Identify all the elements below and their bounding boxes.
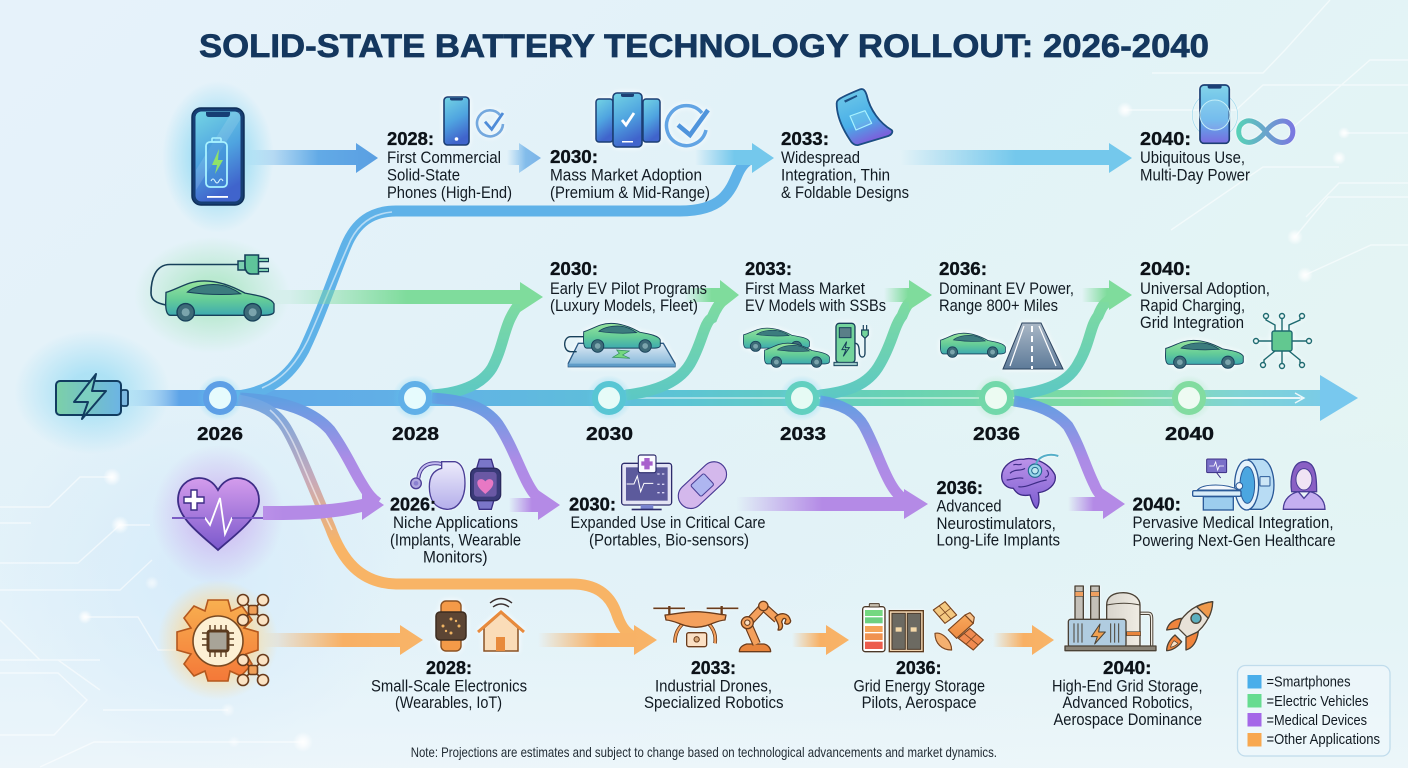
text: smartphones 2033: & Foldable Designs bbox=[781, 183, 909, 202]
text: smartphones 2033: 2033: bbox=[781, 129, 829, 149]
text: EV 2033: First Mass Market bbox=[745, 279, 865, 298]
timeline node 2033 bbox=[779, 375, 825, 421]
text: other 2028 bbox=[371, 658, 527, 712]
text: EV 2040 bbox=[1140, 259, 1270, 332]
text: EV 2030: (Luxury Models, Fleet) bbox=[550, 296, 698, 315]
row arrows: electric vehicles bbox=[271, 280, 1132, 312]
icon: industrial drone and robot arm bbox=[653, 601, 791, 652]
text: other 2033: Industrial Drones, bbox=[655, 677, 772, 696]
branch: EV from 2033 bbox=[820, 297, 918, 395]
text: medical 2040 bbox=[1132, 495, 1336, 550]
text: smartphones 2040 bbox=[1140, 129, 1250, 185]
title: SOLID-STATE BATTERY TECHNOLOGY ROLLOUT: 2026-2040 bbox=[199, 28, 1209, 64]
text: EV 2036 bbox=[939, 259, 1074, 315]
text: medical 2036: Long-Life Implants bbox=[936, 531, 1060, 550]
text: medical 2030: (Portables, Bio-sensors) bbox=[589, 531, 749, 550]
icon: phone and check 2028 bbox=[444, 97, 503, 145]
timeline node 2028 bbox=[392, 375, 438, 421]
timeline node 2040 bbox=[1166, 375, 1212, 421]
timeline year labels: 2030 bbox=[586, 424, 633, 444]
text: other 2033: Specialized Robotics bbox=[644, 693, 784, 712]
text: EV 2040: 2040: bbox=[1140, 259, 1191, 279]
text: EV 2030 bbox=[550, 259, 707, 315]
timeline node 2036 bbox=[973, 375, 1019, 421]
branch: medical from 2028 bbox=[432, 398, 544, 503]
text: EV 2033: EV Models with SSBs bbox=[745, 296, 886, 315]
text: EV 2036: 2036: bbox=[939, 259, 987, 279]
branch: other applications bbox=[238, 400, 634, 637]
text: EV 2030: Early EV Pilot Programs bbox=[550, 279, 707, 298]
text: EV 2040: Rapid Charging, bbox=[1140, 296, 1245, 315]
icon: battery start bbox=[14, 330, 170, 454]
text: smartphones 2033: Widespread bbox=[781, 148, 860, 167]
branch: EV from 2028 bbox=[432, 297, 530, 395]
icon: car and road bbox=[940, 323, 1063, 369]
text: smartphones 2030: (Premium & Mid-Range) bbox=[550, 183, 710, 202]
text: other 2028: Small-Scale Electronics bbox=[371, 677, 527, 696]
timeline year labels: 2026 bbox=[197, 424, 243, 444]
icon: orange smartwatch and smart home bbox=[436, 598, 524, 651]
icon: MRI scanner and clinician bbox=[1193, 459, 1325, 510]
text: smartphones 2030 bbox=[550, 147, 710, 202]
text: medical 2030 bbox=[569, 495, 766, 550]
text: smartphones 2028: Phones (High-End) bbox=[387, 183, 512, 202]
text: EV 2040: Grid Integration bbox=[1140, 313, 1244, 332]
row arrows: medical bbox=[263, 489, 1125, 520]
text: other 2036: Grid Energy Storage bbox=[854, 677, 985, 696]
icon: electric vehicle category bbox=[134, 237, 290, 353]
text: other 2036 bbox=[854, 658, 985, 712]
text: smartphones 2033: Integration, Thin bbox=[781, 166, 890, 185]
text: other 2033 bbox=[644, 658, 784, 712]
branch: medical from 2026 bbox=[240, 398, 378, 503]
text: smartphones 2028 bbox=[387, 129, 512, 202]
timeline year labels: 2040 bbox=[1165, 424, 1214, 444]
text: other 2040: High-End Grid Storage, bbox=[1052, 677, 1202, 696]
text: medical 2026 bbox=[390, 495, 521, 567]
branch: medical from 2036 bbox=[1014, 401, 1112, 503]
icon: cars and charger bbox=[743, 323, 868, 367]
text: EV 2036: Dominant EV Power, bbox=[939, 279, 1074, 298]
legend: =Other Applications bbox=[1266, 731, 1380, 748]
timeline year labels: 2033 bbox=[780, 424, 826, 444]
text: other 2040 bbox=[1052, 658, 1202, 729]
text: medical 2036: 2036: bbox=[936, 478, 983, 498]
icon: foldable phone 2033 bbox=[837, 89, 892, 145]
text: EV 2040: Universal Adoption, bbox=[1140, 279, 1270, 298]
timeline year labels: 2036 bbox=[973, 424, 1020, 444]
legend: =Medical Devices bbox=[1266, 712, 1367, 729]
icon: car on charging pad bbox=[565, 323, 675, 367]
text: other 2040: Advanced Robotics, bbox=[1062, 693, 1193, 712]
branch: EV from 2030 bbox=[626, 297, 726, 395]
icon: car and chip network bbox=[1165, 314, 1312, 368]
icon: smartphone category bbox=[162, 81, 274, 233]
text: other 2040: 2040: bbox=[1103, 658, 1152, 678]
text: other 2036: Pilots, Aerospace bbox=[862, 693, 977, 712]
timeline node 2026 bbox=[197, 375, 243, 421]
text: other 2028: (Wearables, IoT) bbox=[395, 693, 502, 712]
text: smartphones 2040: Multi-Day Power bbox=[1140, 166, 1250, 185]
text: smartphones 2028: 2028: bbox=[387, 129, 434, 149]
icon: phones and check 2030 bbox=[596, 93, 708, 147]
main timeline arrow bbox=[130, 375, 1358, 421]
icon: other applications category bbox=[158, 580, 278, 700]
legend: =Electric Vehicles bbox=[1266, 693, 1368, 710]
row arrows: other applications bbox=[263, 625, 1054, 655]
text: smartphones 2030: 2030: bbox=[550, 147, 598, 167]
branch: EV from 2036 bbox=[1014, 297, 1116, 395]
text: medical 2026: (Implants, Wearable bbox=[390, 531, 521, 550]
icon: battery bank and satellite bbox=[863, 602, 983, 652]
row arrows: smartphones bbox=[246, 143, 1132, 173]
text: medical 2026: Monitors) bbox=[423, 548, 488, 567]
text: medical 2030: Expanded Use in Critical Care bbox=[570, 513, 766, 532]
text: medical 2026: 2026: bbox=[390, 495, 436, 515]
text: medical 2040: 2040: bbox=[1132, 495, 1181, 515]
timeline year labels: 2028 bbox=[392, 424, 439, 444]
text: other 2040: Aerospace Dominance bbox=[1054, 710, 1202, 729]
text: medical 2036 bbox=[936, 478, 1060, 550]
icon: pacemaker and smartwatch bbox=[411, 459, 501, 509]
branch: smartphones bbox=[237, 158, 752, 396]
text: medical 2040: Powering Next-Gen Healthcare bbox=[1132, 531, 1336, 550]
text: medical 2040: Pervasive Medical Integration, bbox=[1132, 513, 1334, 532]
text: smartphones 2040: 2040: bbox=[1140, 129, 1191, 149]
icon: phone and infinity 2040 bbox=[1192, 85, 1293, 143]
timeline year labels bbox=[197, 424, 1214, 444]
text: other 2036: 2036: bbox=[896, 658, 942, 678]
text: EV 2036: Range 800+ Miles bbox=[939, 296, 1058, 315]
icon: medical category bbox=[152, 445, 284, 585]
text: smartphones 2028: Solid-State bbox=[387, 166, 460, 185]
text: other 2033: 2033: bbox=[691, 658, 736, 678]
text: smartphones 2030: Mass Market Adoption bbox=[550, 166, 702, 185]
text: EV 2033: 2033: bbox=[745, 259, 792, 279]
text: EV 2030: 2030: bbox=[550, 259, 598, 279]
text: medical 2026: Niche Applications bbox=[393, 513, 518, 532]
legend bbox=[1238, 666, 1390, 756]
text: medical 2036: Neurostimulators, bbox=[936, 514, 1056, 533]
text: smartphones 2033 bbox=[781, 129, 909, 202]
icon: monitor and bandage bbox=[622, 455, 732, 514]
icon: grid storage and rocket bbox=[1065, 586, 1213, 651]
text: EV 2033 bbox=[745, 259, 886, 315]
timeline node 2030 bbox=[586, 375, 632, 421]
text: medical 2036: Advanced bbox=[936, 497, 1002, 516]
footnote: Note: Projections are estimates and subject to change based on technological advancements and market dynamics. bbox=[411, 745, 997, 760]
text: medical 2030: 2030: bbox=[569, 495, 616, 515]
legend: =Smartphones bbox=[1266, 674, 1350, 691]
branch: medical from 2033 bbox=[820, 401, 912, 503]
text: other 2028: 2028: bbox=[426, 658, 472, 678]
text: smartphones 2040: Ubiquitous Use, bbox=[1140, 148, 1245, 167]
icon: brain implant bbox=[1002, 455, 1058, 508]
text: smartphones 2028: First Commercial bbox=[387, 148, 501, 167]
